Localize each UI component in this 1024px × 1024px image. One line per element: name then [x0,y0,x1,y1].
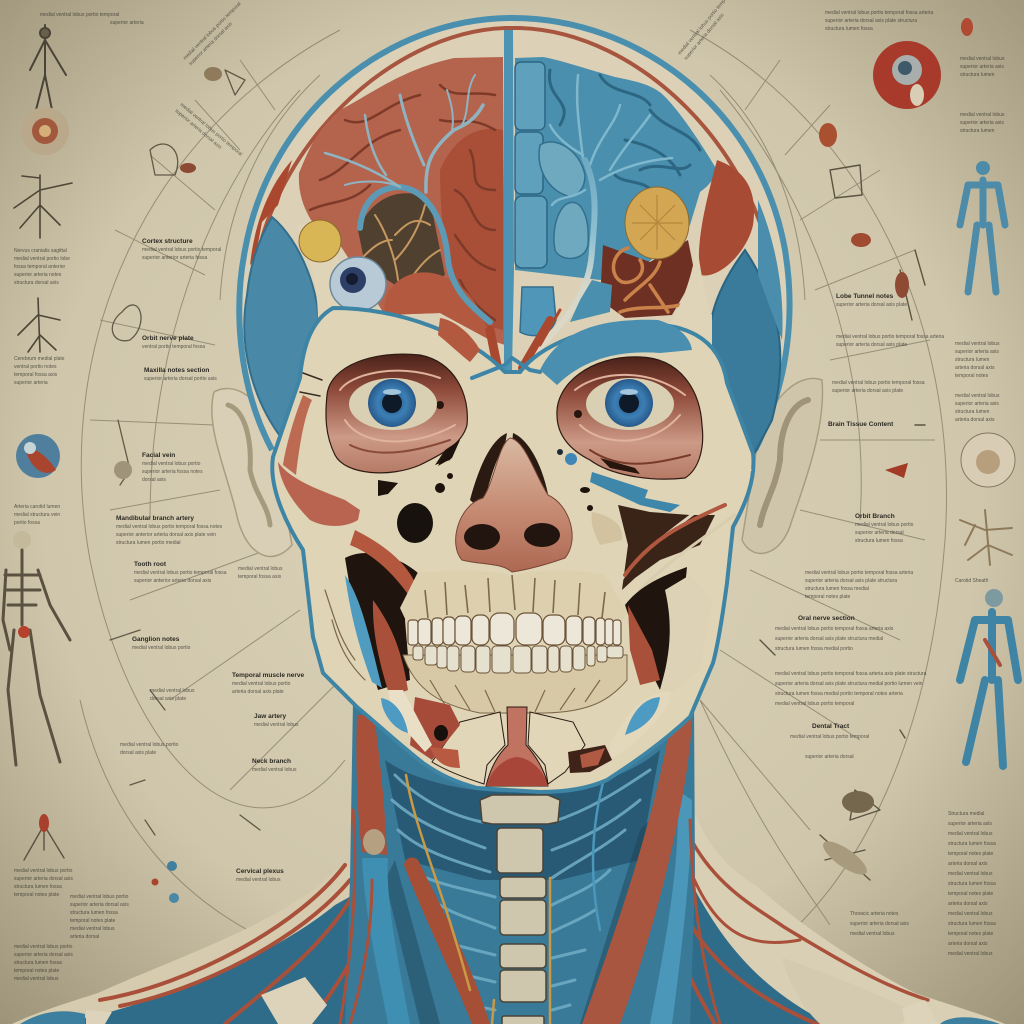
annotation block 26: Lobe Tunnel notes [836,293,894,300]
annotation block 1: Nervus cranialis sagittal [14,248,67,254]
right inner cavity [600,240,695,318]
right brain light lobes [539,142,588,258]
annotation block 25: structura lumen [960,128,995,134]
neck yellow nerves [406,775,550,1024]
left neck red strap [404,858,490,1024]
left eye [349,378,437,430]
left jaw bone lines [325,590,365,680]
annotation block 18: structura lumen fossa [14,884,62,890]
left blue temple [244,217,318,440]
annotation block 23: superior arteria [110,20,144,26]
figure: small red organ [819,18,973,478]
left mouth red strands [350,530,418,600]
annotation block 37: superior arteria axis [955,349,999,355]
annotation block 19: temporal notes plate [70,918,116,924]
yellow disc left [299,220,341,262]
annotation block 34: Dental Tract [812,723,850,730]
annotation block 31: medial ventral lobus portio temporal fossa arteria [805,570,913,576]
left cheek slits [314,440,593,548]
annotation block 3: medial structura vein [14,512,60,518]
annotation block 15: dorsal axis plate [120,750,156,756]
right orange coils [613,248,680,312]
left outer red strip [283,395,312,475]
right cheek blue strap [590,472,680,512]
annotation block 26: superior arteria dorsal axis plate [836,302,907,308]
annotation block 20: superior arteria dorsal axis [14,952,73,958]
figure: small brown organ [114,67,222,479]
annotation block 9: medial ventral lobus portio temporal fossa [134,570,227,576]
annotation block 6: superior arteria dorsal portio axis [144,376,217,382]
right eye [586,378,674,430]
figure: small red torso [24,814,64,860]
annotation block 4: Cortex structure [142,238,193,245]
annotation block 35: arteria dorsal axis [948,901,988,907]
left strap with blue oval [388,690,432,752]
figure: blue body upper right [960,161,1005,292]
annotation block 12: medial ventral lobus portio [232,681,291,687]
center blue bridge vessel [472,358,540,378]
annotation block 32: Oral nerve section [798,615,855,622]
annotation block 37: arteria dorsal axis [955,417,995,423]
right shoulder document patch [782,958,915,1024]
annotation block 35: arteria dorsal axis [948,941,988,947]
right jaw cream strip [660,575,712,692]
left blue oval [381,698,408,733]
figure: spidery nerve two [18,298,60,352]
chin red base [486,757,548,786]
annotation block 30: medial ventral lobus portio [855,522,914,528]
annotation block 37: arteria dorsal axis [955,365,995,371]
annotation block 35: medial ventral lobus [948,831,993,837]
annotation block 7: superior arteria fossa notes [142,469,203,475]
neck muscle stripes [392,770,650,1010]
blue lower lobe [520,287,556,336]
left brain lower darker lobes [440,129,503,330]
figure: right pale circle [961,433,1015,487]
shoulder vessels [100,843,928,1024]
annotation block 35: temporal notes plate [948,931,994,937]
spine vertebrae [480,795,560,1024]
annotation block 3: Arteria carotid lumen [14,504,60,510]
annotation block 4: superior anterior arteria fossa [142,255,208,261]
right outer temple band [758,200,783,340]
lower jaw root lines [430,680,600,712]
annotation block 33: medial ventral lobus portio temporal fossa arteria axis plate structura [775,671,927,677]
annotation block 33: structura lumen fossa medial portio temporal notes arteria [775,691,903,697]
left temporal red strip [250,160,292,265]
annotation block 35: structura lumen fossa [948,881,996,887]
annotation block 11: Ganglion notes [132,636,180,643]
cranium blue outline [239,18,790,450]
left ear [212,388,292,556]
figure: sketch organs [760,165,925,880]
annotation block 35: temporal notes plate [948,891,994,897]
nostrils [464,523,560,550]
left brow bone shadow line [300,373,322,396]
cranium fill [239,18,790,450]
annotation block 35: medial ventral lobus [948,871,993,877]
left cream bone strut [296,222,345,320]
neck dark shading under chin [385,750,660,880]
annotation block 21: superior arteria dorsal axis [188,21,234,67]
figure: sketch diagrams [110,70,260,835]
right ear fold [760,400,808,525]
right column small anatomical figures [760,18,1018,880]
right brain folds [549,70,700,195]
annotation block 24: structura lumen fossa [825,26,873,32]
annotation block 2: ventral portio notes [14,364,57,370]
right ear [742,378,823,553]
annotation block 37: superior arteria axis [955,401,999,407]
upper jaw bone [400,570,627,625]
figure: top left nervous body [30,25,66,110]
nose [456,438,572,572]
annotation block 18: temporal notes plate [14,892,60,898]
left lower red lobes [384,272,490,340]
right blue oval [625,697,660,735]
left cheek red muscle [278,462,360,526]
right blue temple [709,250,780,462]
annotation block 15: medial ventral lobus portio [120,742,179,748]
left cavity nerves [362,205,440,280]
skull face [272,308,753,792]
right neck red strap [582,712,692,1024]
face bone mask [272,308,753,792]
annotation block 17: medial ventral lobus [236,877,281,883]
left neck thin vessels [340,810,372,1024]
left side annotations [14,1,305,982]
annotation block 36: medial ventral lobus [850,931,895,937]
annotation block 19: arteria dorsal [70,934,99,940]
right socket dark slits [574,410,640,474]
annotation block 23: medial ventral lobus portio temporal [40,12,119,18]
right neck blue tube [650,790,692,1024]
annotation block 25: structura lumen [960,72,995,78]
annotation block 35: temporal notes plate [948,851,994,857]
neck base [345,700,695,1024]
annotation block 25: superior arteria axis [960,64,1004,70]
neck thin blue nerve [593,775,605,930]
blue eye disc [330,257,386,311]
annotation block 4: medial ventral lobus portio temporal [142,247,221,253]
right vessel tree [550,75,672,205]
center red muscles [490,310,560,368]
annotation block 19: medial ventral lobus [70,926,115,932]
lower jaw bone [403,655,627,713]
annotation block 36: superior arteria dorsal axis [850,921,909,927]
left brain dark cavity [358,193,445,285]
annotation block 35: medial ventral lobus [948,911,993,917]
annotation block 35: medial ventral lobus [948,951,993,957]
annotation block 24: superior arteria dorsal axis plate structura [825,18,917,24]
figure: globe organ [16,434,60,478]
left vessel tree [325,75,490,322]
annotation block 7: dorsal axis [142,477,166,483]
annotation block 35: arteria dorsal axis [948,861,988,867]
annotation block 25: superior arteria axis [960,120,1004,126]
brain right hemisphere [515,57,717,280]
annotation block 24: medial ventral lobus portio temporal fossa arteria [825,10,933,16]
left socket dark slits [435,401,460,465]
left column small anatomical figures [3,25,260,903]
annotation block 7: Facial vein [142,452,175,459]
annotation block 9: superior anterior arteria dorsal axis [134,578,212,584]
annotation block 2: temporal fossa axis [14,372,58,378]
annotation block 16: medial ventral lobus [252,767,297,773]
annotation block 31: structura lumen fossa medial [805,586,869,592]
right cheek cream bit [592,512,622,545]
left neck blue tube [362,858,410,1024]
annotation block 25: medial ventral lobus [960,56,1005,62]
annotation block 27: superior arteria dorsal axis plate [836,342,907,348]
annotation block 32: superior arteria dorsal axis plate structura medial [775,636,883,642]
right mouth red muscle [628,605,660,685]
annotation block 36: Thoracic arteria notes [850,911,899,917]
annotation block 19: structura lumen fossa [70,910,118,916]
left cheek hole [397,503,433,543]
right shoulder far blue [940,1017,1000,1024]
annotation block 34: medial ventral lobus portio temporal [790,734,869,740]
left neck muscle [356,715,387,855]
figure: red circular organ [873,41,941,109]
right cheek dark strands [618,505,715,590]
figure: circular organ [21,107,69,155]
annotation block 30: Orbit Branch [855,513,895,520]
annotation block 8: structura lumen portio medial [116,540,180,546]
annotation block 32: medial ventral lobus portio temporal fossa arteria axis [775,626,894,632]
annotation block 9: Tooth root [134,561,167,568]
annotation block 13: Jaw artery [254,713,287,720]
left cream strap under cheek [310,530,360,563]
annotation block 30: structura lumen fossa [855,538,903,544]
annotation block 39: Carotid Sheath [955,578,989,584]
annotation block 22: medial ventral lobus portio temporal [179,102,243,157]
annotation block 19: medial ventral lobus portio [70,894,129,900]
annotation block 27: medial ventral lobus portio temporal fossa arteria [836,334,944,340]
right shoulder blue muscle [670,880,830,1024]
annotation block 37: medial ventral lobus [955,393,1000,399]
left socket folds [340,371,455,453]
annotation block 1: structura dorsal axis [14,280,59,286]
right red temporal lobe [699,160,754,276]
annotation block 20: temporal notes plate [14,968,60,974]
annotation block 5: ventral portio temporal fossa [142,344,205,350]
figure: dark sketch cluster [819,272,909,880]
annotation block 20: medial ventral lobus portio [14,944,73,950]
annotation block 14: medial ventral lobus [150,688,195,694]
annotation block 21: medial ventral lobus portio temporal [182,1,242,61]
red brow muscle [438,318,480,362]
concentric chart arcs [80,30,946,950]
annotation block 28: medial ventral lobus portio temporal fossa [832,380,925,386]
left brain folds [310,85,495,320]
annotation block 31: temporal notes plate [805,594,851,600]
annotation block 5: Orbit nerve plate [142,335,194,342]
shoulders [12,810,1005,1024]
teeth [408,613,623,673]
annotation block 10: medial ventral lobus [238,566,283,572]
figure: nerve cluster [960,510,1012,565]
annotation block 28: superior arteria dorsal axis plate [832,388,903,394]
annotation block 12: arteria dorsal axis plate [232,689,284,695]
annotation block 37: structura lumen [955,409,990,415]
annotation block 11: medial ventral lobus portio [132,645,191,651]
annotation block 12: Temporal muscle nerve [232,672,305,679]
annotation block 31: superior arteria dorsal axis plate structura [805,578,897,584]
annotation block 20: structura lumen fossa [14,960,62,966]
right brain squared lobes [515,62,547,268]
left lower red patch [430,747,460,768]
right socket folds [575,375,690,464]
annotation block 17: Cervical plexus [236,868,284,875]
annotation block 20: medial ventral lobus [14,976,59,982]
left neck ball joint [363,829,385,855]
left ear fold [228,405,270,525]
chin right pad [528,712,585,784]
left shoulder skin [12,860,380,1024]
neck [340,700,720,1024]
annotation block 34: superior arteria dorsal [805,754,854,760]
chin left pad [432,712,505,784]
upper teeth row [408,613,621,645]
right eye socket [557,357,703,479]
right lower dark [568,745,612,773]
right eye blue dot [557,449,577,465]
right blue patch [570,280,612,322]
ears [212,378,823,556]
annotation block 37: structura lumen [955,357,990,363]
shoulder bones [86,977,938,1024]
annotation block 8: superior anterior arteria dorsal axis plate vein [116,532,216,538]
right neck thin vessels [690,820,720,1024]
annotation block 37: temporal notes [955,373,989,379]
annotation block 37: medial ventral lobus [955,341,1000,347]
left shoulder far blue [20,1011,85,1024]
annotation block 33: medial ventral lobus portio temporal [775,701,854,707]
annotation block 19: superior arteria dorsal axis [70,902,129,908]
right strap cream [610,690,672,760]
annotation block 8: Mandibular branch artery [116,515,194,522]
annotation block 6: Maxilla notes section [144,367,209,374]
left mouth hollow [345,553,420,690]
left shoulder blue muscle [60,880,380,1024]
annotation block 2: Cerebrum medial plate [14,356,65,362]
annotation block 35: superior arteria axis [948,821,992,827]
left chin hole [434,725,448,741]
left eye socket [326,354,467,473]
annotation block 16: Neck branch [252,758,291,765]
nose side dark slits [470,433,550,510]
annotation block 29: Brain Tissue Content [828,421,894,428]
annotation block 33: superior arteria dorsal axis plate structura medial portio lumen vein [775,681,923,687]
annotation block 14: dorsal axis plate [150,696,186,702]
figure: spidery nerve [14,175,72,238]
lower teeth row [413,646,623,673]
right trunk vessel [536,160,595,352]
annotation block 8: medial ventral lobus portio temporal fossa notes [116,524,223,530]
annotation block 25: medial ventral lobus [960,112,1005,118]
chin pink stem [486,707,548,786]
left lower cavity [410,697,460,760]
right lower red [580,748,605,768]
right side annotations [677,0,1005,957]
neck dark side gaps [385,820,650,1024]
figure: skeleton [3,531,70,765]
right shoulder skin [660,810,1005,1024]
annotation block 1: fossa temporal anterior [14,264,65,270]
annotation block 7: medial ventral lobus portio [142,461,201,467]
annotation block 18: superior arteria dorsal axis [14,876,73,882]
annotation block 32: structura lumen fossa medial portio [775,646,853,652]
cranium [239,18,790,462]
yellow disc right [625,187,689,259]
upper jaw root lines [425,575,605,618]
annotation block 22: superior arteria dorsal axis [174,108,223,151]
annotation block 35: Structura medial [948,811,984,817]
cranium red inner line [252,28,776,290]
left blue strap [345,575,382,688]
annotation block 35: structura lumen fossa [948,841,996,847]
annotation block 35: structura lumen fossa [948,921,996,927]
left red muscle [373,600,408,697]
annotation block 13: medial ventral lobus [254,722,299,728]
annotation block 3: portio fossa [14,520,40,526]
annotation block 30: superior arteria dorsal [855,530,904,536]
annotation block 1: superior arteria notes [14,272,62,278]
annotation block 38: superior arteria dorsal axis [683,12,726,61]
figure: blue dots [152,861,179,903]
brain central fissure [504,30,514,370]
right cheek strands [615,470,750,590]
right cream bone spike [665,243,712,345]
annotation block 10: temporal fossa axis [238,574,282,580]
right brow blue band [540,320,692,385]
annotation block 1: medial ventral portio lobe [14,256,70,262]
brain left hemisphere [299,57,505,345]
annotation block 2: superior arteria [14,380,48,386]
annotation block 18: medial ventral lobus portio [14,868,73,874]
right mouth hollow [625,567,687,690]
figure: blue body lower right [960,589,1018,766]
